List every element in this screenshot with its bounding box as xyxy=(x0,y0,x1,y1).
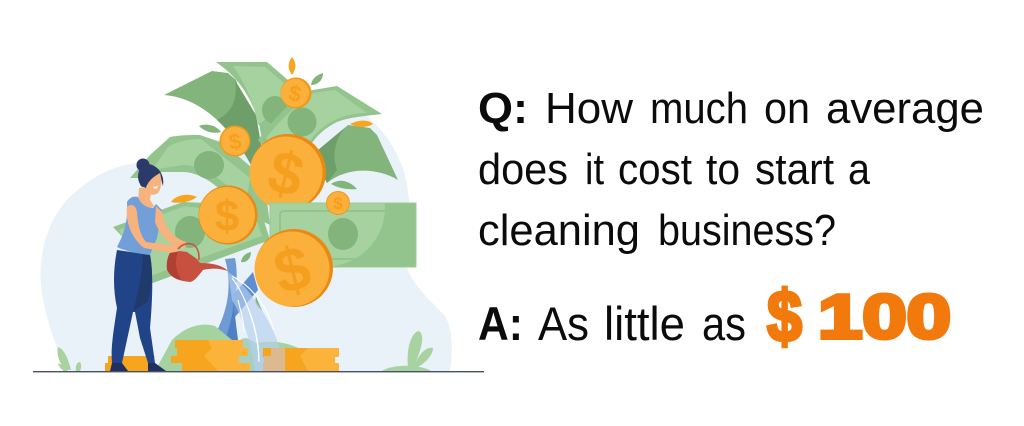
neck and chest xyxy=(138,186,154,209)
ground line xyxy=(33,371,484,372)
bill: right horizontal xyxy=(270,203,416,267)
question text: start xyxy=(755,145,834,194)
bill: lower left tilted xyxy=(113,202,270,284)
coin: top: $ xyxy=(286,80,303,107)
arms xyxy=(127,205,178,254)
hair xyxy=(138,164,163,188)
question text: cleaning xyxy=(478,206,640,255)
coin: large lower xyxy=(254,229,333,308)
question text: to xyxy=(706,145,740,194)
question text: How xyxy=(545,84,633,133)
mound of bills at base xyxy=(155,325,310,371)
question text: cost xyxy=(618,145,692,194)
blue top xyxy=(117,197,162,255)
answer text: little xyxy=(604,297,685,350)
coin: large upper xyxy=(250,134,326,210)
answer text: As xyxy=(538,297,589,350)
question label: Q: xyxy=(478,84,528,133)
answer amount: $100: 100 xyxy=(818,283,951,352)
question text: much xyxy=(650,84,748,133)
face xyxy=(147,172,161,195)
orange petals xyxy=(171,57,373,203)
person: woman watering xyxy=(110,158,186,371)
shoes xyxy=(110,363,166,371)
coin stack: left xyxy=(105,356,155,371)
coin stack: right xyxy=(263,348,339,371)
bill: upper left back leaf xyxy=(164,71,262,165)
answer amount: $100 xyxy=(767,277,951,357)
bill: top centre xyxy=(216,62,288,140)
watering can xyxy=(167,244,228,282)
illustration: money tree xyxy=(33,57,484,372)
answer amount: $100: $ xyxy=(767,277,802,357)
hair bun xyxy=(136,158,150,172)
bill: right back leaf xyxy=(312,125,398,183)
legs xyxy=(112,250,155,363)
answer text xyxy=(478,297,746,350)
plant: left xyxy=(57,347,81,371)
question text: average xyxy=(826,84,984,133)
question text xyxy=(478,84,984,255)
background blob xyxy=(41,105,452,371)
mouth xyxy=(153,186,158,189)
bill: upper right xyxy=(258,86,382,165)
water stream xyxy=(228,272,287,371)
coin: left small: $ xyxy=(227,128,243,155)
question text: a xyxy=(848,145,870,194)
coin stack: centre xyxy=(171,340,250,371)
coin: top xyxy=(280,78,312,108)
bill: middle left xyxy=(130,135,270,225)
question text: it xyxy=(585,145,604,194)
tree trunk xyxy=(212,258,258,340)
question text: does xyxy=(478,145,568,194)
coin: large upper: $ xyxy=(262,137,310,210)
answer text: A: xyxy=(478,297,523,350)
leaves xyxy=(199,73,357,310)
coin: right small: $ xyxy=(333,194,343,213)
coin: middle xyxy=(198,186,258,244)
plant: right xyxy=(382,331,433,371)
answer text: as xyxy=(702,297,746,350)
question text: business? xyxy=(658,206,836,255)
coin: left small xyxy=(220,126,250,156)
question text: on xyxy=(764,84,810,133)
dark shadow on leg xyxy=(134,254,152,311)
coin: middle: $ xyxy=(215,192,239,241)
coin: right small xyxy=(326,191,350,215)
coin: large lower: $ xyxy=(267,233,317,308)
